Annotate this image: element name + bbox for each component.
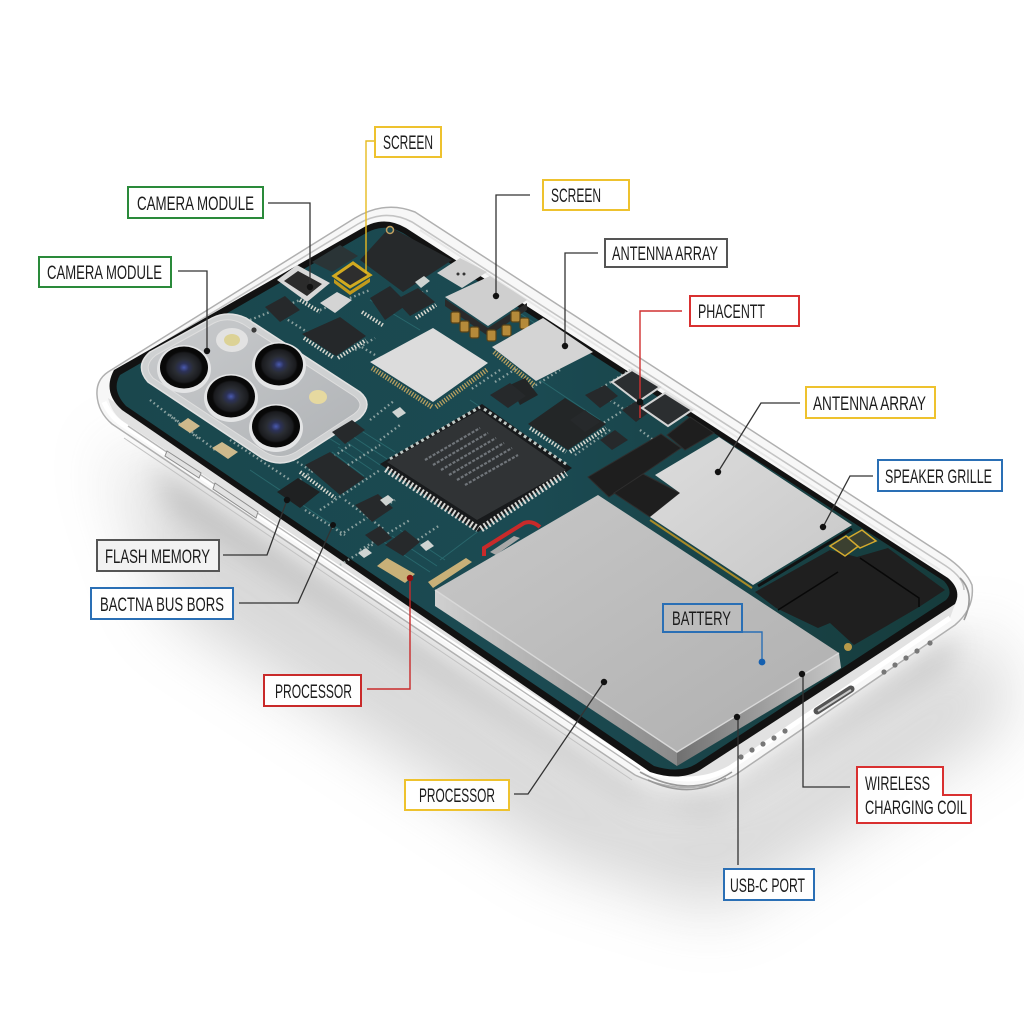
drop shadow <box>110 440 1010 910</box>
label: screen 1: SCREEN <box>383 133 433 154</box>
label: flash memory: FLASH MEMORY <box>105 547 210 568</box>
silver ribbon <box>490 536 520 555</box>
leader: phacentt <box>637 311 682 418</box>
label: antenna array 2 <box>806 387 935 418</box>
chip: small center right <box>490 383 526 408</box>
chips: lower right small <box>570 385 652 450</box>
red loop connector <box>484 522 540 556</box>
gold pads <box>830 530 876 556</box>
leader: red processor <box>367 575 413 689</box>
label: wireless charging coil: WIRELESS <box>865 774 930 795</box>
chip: large top square <box>360 227 452 292</box>
small screws <box>844 643 852 651</box>
label: antenna array 1 <box>605 239 727 267</box>
label: flash memory <box>97 540 219 571</box>
label: processor yellow: PROCESSOR <box>419 786 495 807</box>
leader: antenna array 2 <box>715 403 800 475</box>
chip: small silver square <box>320 292 352 313</box>
leader: screen 1 <box>366 141 374 273</box>
label: screen 2: SCREEN <box>551 186 601 207</box>
chip: flash memory <box>277 478 320 508</box>
phone body: transparent case <box>97 207 972 790</box>
icon: flash <box>216 328 248 352</box>
label: battery <box>663 604 742 632</box>
label: bactna bus bors: BACTNA BUS BORS <box>100 595 224 616</box>
chips: extra small silver parts <box>358 276 434 558</box>
icon: lens 3 <box>204 374 258 422</box>
label: camera module 2 <box>39 257 171 287</box>
chip: small lower left <box>332 420 420 556</box>
label: phacentt: PHACENTT <box>698 302 765 323</box>
leader: camera module 2 <box>178 271 210 354</box>
chip: left board memory <box>300 452 365 498</box>
label: processor red: PROCESSOR <box>275 682 352 703</box>
chip: silver-framed black modules <box>612 370 692 426</box>
label: antenna array 1: ANTENNA ARRAY <box>612 244 718 265</box>
chip: silver shield screen <box>445 276 527 336</box>
leader: yellow processor <box>514 679 607 794</box>
chip: gold framed sensor <box>334 263 370 295</box>
chip: silver shield center <box>370 328 488 407</box>
leader: wireless charging coil <box>799 671 850 787</box>
icon: lens 2 <box>252 342 306 390</box>
chip: flex connector <box>377 558 415 583</box>
shield plate <box>650 437 852 588</box>
label: screen 2 <box>543 180 629 210</box>
label: camera module 1: CAMERA MODULE <box>137 194 254 215</box>
leader: bus label <box>239 522 336 603</box>
phone interior: circuit board in black frame <box>110 221 957 777</box>
label: processor red <box>264 675 361 706</box>
label: processor yellow <box>405 780 509 810</box>
icon: LED <box>309 390 327 404</box>
leader: USB-C port <box>734 714 740 865</box>
chip: camera sensor module <box>277 265 330 302</box>
chip: small dark cluster <box>312 245 358 272</box>
icon: top corner via <box>386 226 394 234</box>
label: camera module 2: CAMERA MODULE <box>47 263 162 284</box>
battery <box>435 495 841 766</box>
label: speaker grille <box>878 460 1002 491</box>
chip: silver shield right <box>492 318 593 386</box>
icon: lens 4 <box>249 404 303 452</box>
label: battery: BATTERY <box>672 609 731 630</box>
chips and components on board <box>178 226 714 588</box>
label: wireless charging coil: CHARGING COIL <box>865 798 967 819</box>
label: phacentt <box>690 296 799 326</box>
label: antenna array 2: ANTENNA ARRAY <box>813 394 926 415</box>
label: wireless charging coil <box>857 767 971 823</box>
chip: mid square <box>362 286 408 326</box>
chip: qfp small left <box>302 317 366 358</box>
chip: silver SIM tray <box>437 258 487 288</box>
chip: square right of processor <box>528 398 606 452</box>
chip: dark square right <box>510 378 538 405</box>
leader: screen 2 <box>493 195 530 299</box>
leader: speaker grille <box>820 476 873 530</box>
leader: camera module 1 <box>268 203 313 290</box>
chip: main processor pins <box>380 404 572 532</box>
leader: battery <box>742 632 765 665</box>
label: screen 1 <box>375 127 441 157</box>
panel: camera island <box>141 314 367 463</box>
label: USB-C port <box>724 869 814 900</box>
chip: left small <box>265 296 320 322</box>
label: USB-C port: USB-C PORT <box>730 876 805 897</box>
lower-right dark module <box>755 530 945 651</box>
block: dark battery connectors <box>588 417 714 517</box>
leader: antenna array 1 <box>562 253 598 349</box>
icon: lens 1 <box>157 345 211 393</box>
icon: gold connectors <box>451 311 529 341</box>
icon: left flex connectors <box>178 418 238 459</box>
label: bactna bus bors <box>91 588 233 619</box>
leader: flash memory <box>223 497 290 555</box>
chip: connector strip <box>428 558 472 588</box>
chip: next to top square <box>395 288 436 318</box>
icon: microphone dot <box>251 327 257 333</box>
icon: side buttons <box>165 451 258 518</box>
label: camera module 1 <box>128 187 263 218</box>
USB-C port and speaker holes <box>738 640 933 760</box>
